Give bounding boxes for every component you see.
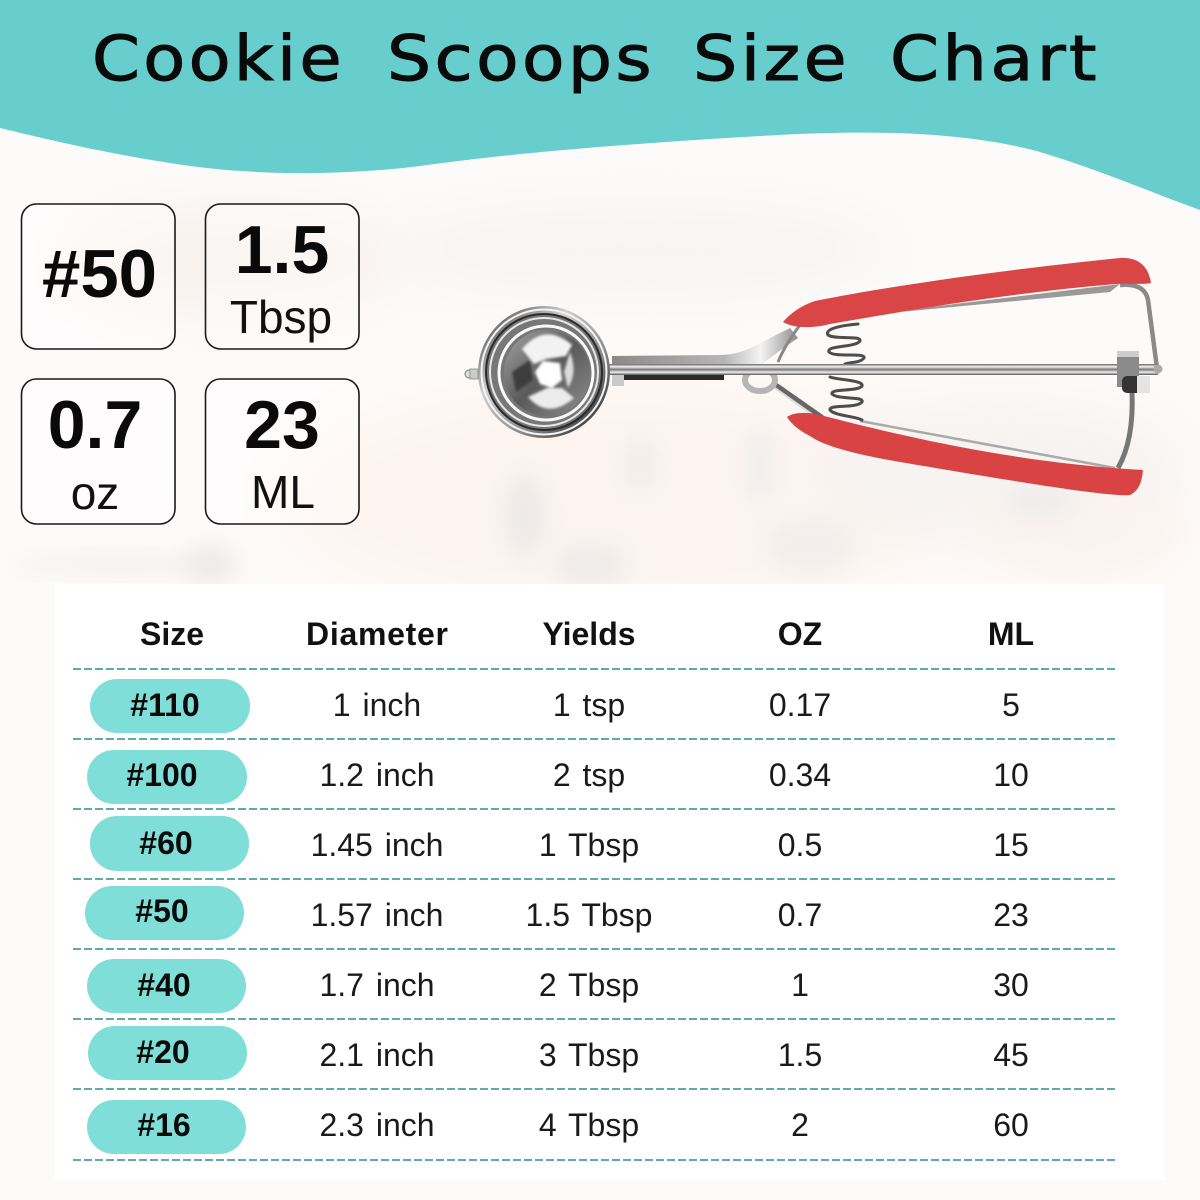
background: blurred cookie photo	[20, 184, 1200, 584]
red grip top	[783, 258, 1151, 327]
table header row: OZ	[778, 616, 822, 652]
row #50: 0.7	[778, 897, 822, 933]
stat tile: size #50	[22, 204, 175, 349]
table header row: ML	[988, 616, 1034, 652]
row #100: #100	[126, 757, 198, 793]
lower arm	[772, 383, 822, 418]
row #50: 1.5 Tbsp	[526, 897, 652, 933]
row #40: 2 Tbsp	[539, 967, 639, 1003]
row #100	[87, 750, 1029, 804]
row #60: 0.5	[778, 827, 822, 863]
metal frame	[830, 284, 1120, 324]
title: Cookie	[92, 22, 345, 95]
row #110: 1 tsp	[553, 687, 625, 723]
row #40: #40	[137, 967, 191, 1003]
spring	[827, 324, 864, 420]
table header row: Yields	[542, 616, 636, 652]
row #20	[88, 1026, 1029, 1080]
row #16	[87, 1100, 1029, 1154]
row #110: 5	[1002, 687, 1020, 723]
scoop stem	[612, 328, 798, 376]
title: Scoops	[387, 22, 655, 95]
row #40: 30	[993, 967, 1029, 1003]
header wave band	[0, 0, 1200, 210]
row #60: #60	[139, 825, 193, 861]
stat tile: 0.7 oz: oz	[71, 467, 119, 519]
row #110	[90, 679, 1020, 733]
row #20: 45	[993, 1037, 1029, 1073]
stat tile: 23 ML: ML	[251, 466, 315, 518]
row #20: 2.1 inch	[319, 1037, 435, 1073]
row #16: 4 Tbsp	[539, 1107, 639, 1143]
row #110: #110	[130, 687, 200, 723]
red grip bottom	[787, 413, 1143, 495]
stat tile: size #50: #50	[42, 236, 157, 312]
stat tile: 1.5 Tbsp	[206, 204, 359, 349]
row #110: 1 inch	[333, 687, 421, 723]
table header row	[140, 616, 1034, 652]
dashed row rules	[73, 669, 1115, 1160]
row #20: #20	[136, 1034, 190, 1070]
row #100: 0.34	[769, 757, 831, 793]
stat tile: 23 ML: 23	[244, 387, 320, 463]
bowl	[504, 330, 590, 416]
row #50	[85, 886, 1029, 940]
row #20: 1.5	[778, 1037, 822, 1073]
title	[92, 22, 1100, 95]
row #40: 1	[791, 967, 809, 1003]
stat tile: 1.5 Tbsp: 1.5	[235, 212, 329, 288]
row #60: 1 Tbsp	[539, 827, 639, 863]
row #100: 1.2 inch	[319, 757, 435, 793]
stat tile: 0.7 oz: 0.7	[48, 387, 142, 463]
row #50: 1.57 inch	[311, 897, 443, 933]
table header row: Diameter	[306, 616, 448, 652]
bowl rim	[478, 306, 610, 438]
row #100: 10	[993, 757, 1029, 793]
row #60	[90, 816, 1029, 871]
stat tile: 0.7 oz	[22, 379, 175, 524]
icon: cookie scoop	[465, 258, 1162, 495]
row #16: 2	[791, 1107, 809, 1143]
row #16: 60	[993, 1107, 1029, 1143]
row #60: 15	[993, 827, 1029, 863]
clip	[1117, 351, 1139, 387]
stat tile: 23 ML	[206, 379, 359, 524]
row #50: 23	[993, 897, 1029, 933]
row #40	[87, 959, 1029, 1013]
stat tile: 1.5 Tbsp: Tbsp	[230, 291, 332, 343]
row #50: #50	[135, 893, 189, 929]
title: Size	[693, 22, 850, 95]
rod	[605, 364, 1158, 375]
row #40: 1.7 inch	[319, 967, 435, 1003]
row #16: 2.3 inch	[319, 1107, 435, 1143]
row #20: 3 Tbsp	[539, 1037, 639, 1073]
title: Chart	[890, 22, 1100, 95]
row #110: 0.17	[769, 687, 831, 723]
table: size chart	[73, 616, 1115, 1160]
row #60: 1.45 inch	[311, 827, 443, 863]
row #100: 2 tsp	[553, 757, 625, 793]
table header row: Size	[140, 616, 204, 652]
row #16: #16	[137, 1107, 191, 1143]
